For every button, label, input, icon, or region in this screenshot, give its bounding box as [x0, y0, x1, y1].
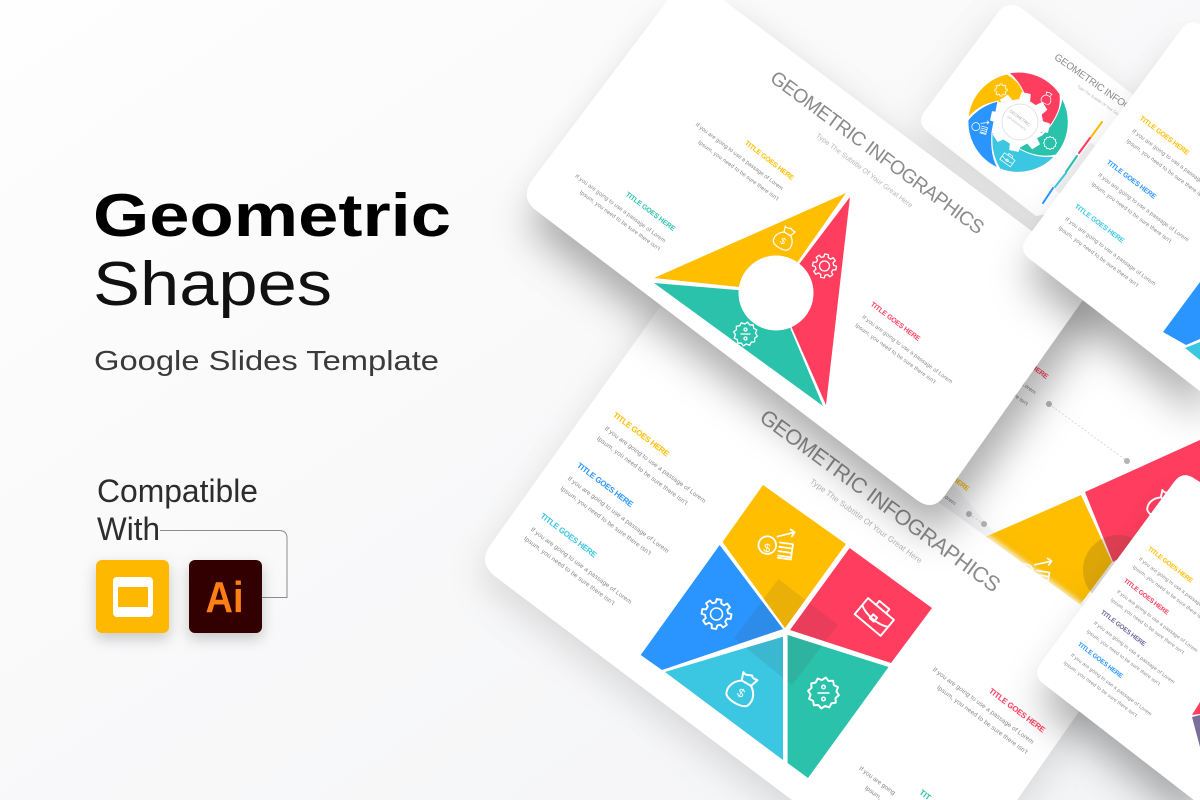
text block: green fragment	[857, 765, 933, 800]
wheel center badge: GEOMETRIC	[1008, 108, 1032, 127]
icon: money bag: $	[735, 685, 748, 701]
wheel center badge: INFOGRAPHICS	[1006, 115, 1027, 132]
fragment text: red paragraph: Ipsum, you need to be sure there isn't	[953, 349, 1029, 408]
text block: blue: TITLE GOES HERE	[1105, 159, 1157, 201]
icon: gear	[811, 252, 838, 280]
icon: percent badge	[732, 320, 759, 348]
text block: purple: If you are going to use a passage of Lorem	[1092, 621, 1176, 685]
stripe backing	[1055, 142, 1097, 195]
text block: blue: TITLE GOES HERE	[1076, 641, 1124, 680]
text block: purple: Ipsum, you need to be sure there isn't	[1085, 629, 1161, 688]
icon: adobe illustrator	[189, 560, 262, 633]
text block: yellow: TITLE GOES HERE	[1138, 115, 1190, 157]
text block: red: If you are going to use a passage of Lorem	[861, 315, 954, 386]
text block: red: If you are going to use a passage of Lorem	[931, 666, 1035, 746]
text block: cyan: TITLE GOES HERE	[539, 511, 599, 560]
text block: blue: TITLE GOES HERE	[575, 461, 635, 509]
text block: yellow: Ipsum, you need to be sure there isn't	[595, 435, 689, 507]
text block: red: Ipsum, you need to be sure there isn't	[935, 684, 1029, 756]
icon: money bag: $	[778, 235, 788, 247]
text block: cyan: Ipsum, you need to be sure there isn't	[522, 535, 616, 607]
text block: red: TITLE GOES HERE	[987, 686, 1047, 735]
wheel card subtitle: Type The Subtitle Of Your Great Here	[1076, 85, 1130, 123]
text block: purple: TITLE GOES HERE	[1099, 609, 1147, 648]
slide card: pentagon infographic	[485, 303, 1129, 800]
compatible with label: Compatible	[97, 473, 258, 509]
slide card: hidden pentagon slide	[869, 150, 1200, 720]
slide card: right top text slide	[1023, 22, 1200, 391]
text block: blue: Ipsum, you need to be sure there isn't	[559, 485, 652, 557]
subtitle: Type The Subtitle Of Your Great Here	[808, 477, 924, 566]
slide card: triangle infographic	[527, 0, 1097, 505]
text block: yellow: Ipsum, you need to be sure there isn't	[697, 140, 780, 202]
dotted connector upper	[1046, 401, 1130, 464]
text block: yellow: TITLE GOES HERE	[743, 140, 795, 182]
text block: red: TITLE GOES HERE	[869, 301, 921, 343]
text block: yellow: If you are going to use a passage of Lorem	[694, 122, 784, 192]
subtitle: Google Slides Template	[94, 345, 439, 376]
compatible with label	[97, 473, 258, 547]
cyan chart fragment	[1185, 342, 1200, 360]
red segment	[1085, 440, 1200, 562]
text block: green: TITLE GOES HERE	[624, 191, 676, 233]
fragment text: yellow paragraph: If you are going to use a passage of Lorem	[869, 439, 957, 507]
colour stripes	[1043, 122, 1102, 203]
yellow segment	[985, 495, 1112, 606]
text block: yellow: TITLE GOES HERE	[611, 410, 671, 459]
title	[93, 182, 451, 319]
text block: blue: Ipsum, you need to be sure there isn't	[1090, 181, 1173, 245]
fragment text: red paragraph: If you are going to use a passage of Lorem	[949, 328, 1037, 396]
fragment text: yellow title: TITLE GOES HERE	[918, 451, 970, 493]
icon: google slides	[96, 560, 169, 633]
compatible with label: With	[97, 511, 160, 547]
slide card: wheel infographic	[921, 5, 1200, 216]
wheel icons	[971, 84, 1059, 167]
subtitle: Type The Subtitle Of Your Great Here	[814, 132, 914, 210]
text block: green: If you are going to use a passage of Lorem	[574, 174, 667, 245]
text block: red: TITLE GOES HERE	[1122, 577, 1170, 617]
text block: blue: Ipsum, you need to be sure there isn't	[1062, 660, 1138, 719]
text block: cyan: TITLE GOES HERE	[1073, 203, 1125, 245]
text block: red: Ipsum, you need to be sure there isn't	[1109, 597, 1185, 656]
wheel center gear	[985, 87, 1055, 157]
dotted connector lower	[966, 511, 987, 527]
text block: blue: If you are going to use a passage of Lorem	[566, 475, 670, 555]
icon: coin with arrow	[757, 525, 795, 560]
wheel center badge	[1002, 104, 1038, 140]
wheel card heading: GEOMETRIC INFOGRAPHICS	[1052, 52, 1168, 138]
title: Shapes	[93, 250, 332, 319]
icon: money bag	[723, 668, 763, 710]
pentagon chart	[641, 485, 932, 778]
text block: blue: If you are going to use a passage of Lorem	[1069, 653, 1153, 717]
coin icon fragment	[1015, 554, 1052, 587]
text block: red: If you are going to use a passage of Lorem	[1115, 589, 1199, 654]
text block: cyan: Ipsum, you need to be sure there isn't	[1057, 225, 1140, 289]
icon: briefcase	[855, 594, 897, 636]
icon: gear	[699, 597, 734, 631]
slide card: right bottom text slide	[1037, 475, 1200, 800]
connector line	[160, 530, 287, 598]
bag icon fragment	[1144, 487, 1180, 523]
center circle	[738, 256, 814, 330]
heading: GEOMETRIC INFOGRAPHICS	[755, 405, 1005, 597]
chart fragments	[1192, 702, 1200, 747]
text block: yellow: TITLE GOES HERE	[1146, 545, 1194, 585]
center overlay circle	[1083, 535, 1153, 605]
title: Geometric	[93, 182, 451, 249]
text block: red: Ipsum, you need to be sure there isn't	[854, 323, 937, 385]
blue chart fragment	[1163, 282, 1200, 345]
triangle chart	[654, 193, 850, 406]
fragment text: red title: TITLE GOES HERE	[997, 339, 1049, 381]
icon: adobe illustrator: Ai	[206, 573, 244, 622]
center diamond overlay	[734, 579, 838, 685]
text block: green fragment: If you are going	[857, 765, 897, 797]
text block: cyan: If you are going to use a passage of Lorem	[529, 526, 633, 606]
wheel chart	[968, 72, 1068, 172]
text block: cyan: If you are going to use a passage of Lorem	[1064, 217, 1157, 288]
icon: money bag	[771, 223, 799, 253]
icon: percent badge	[806, 675, 841, 711]
text block: blue: If you are going to use a passage of Lorem	[1097, 173, 1190, 244]
text block: yellow: If you are going to use a passage of Lorem	[603, 425, 707, 505]
heading: GEOMETRIC INFOGRAPHICS	[766, 67, 988, 239]
text block: green: Ipsum, you need to be sure there isn't	[578, 190, 661, 252]
icon: coin with arrow: $	[762, 541, 772, 556]
